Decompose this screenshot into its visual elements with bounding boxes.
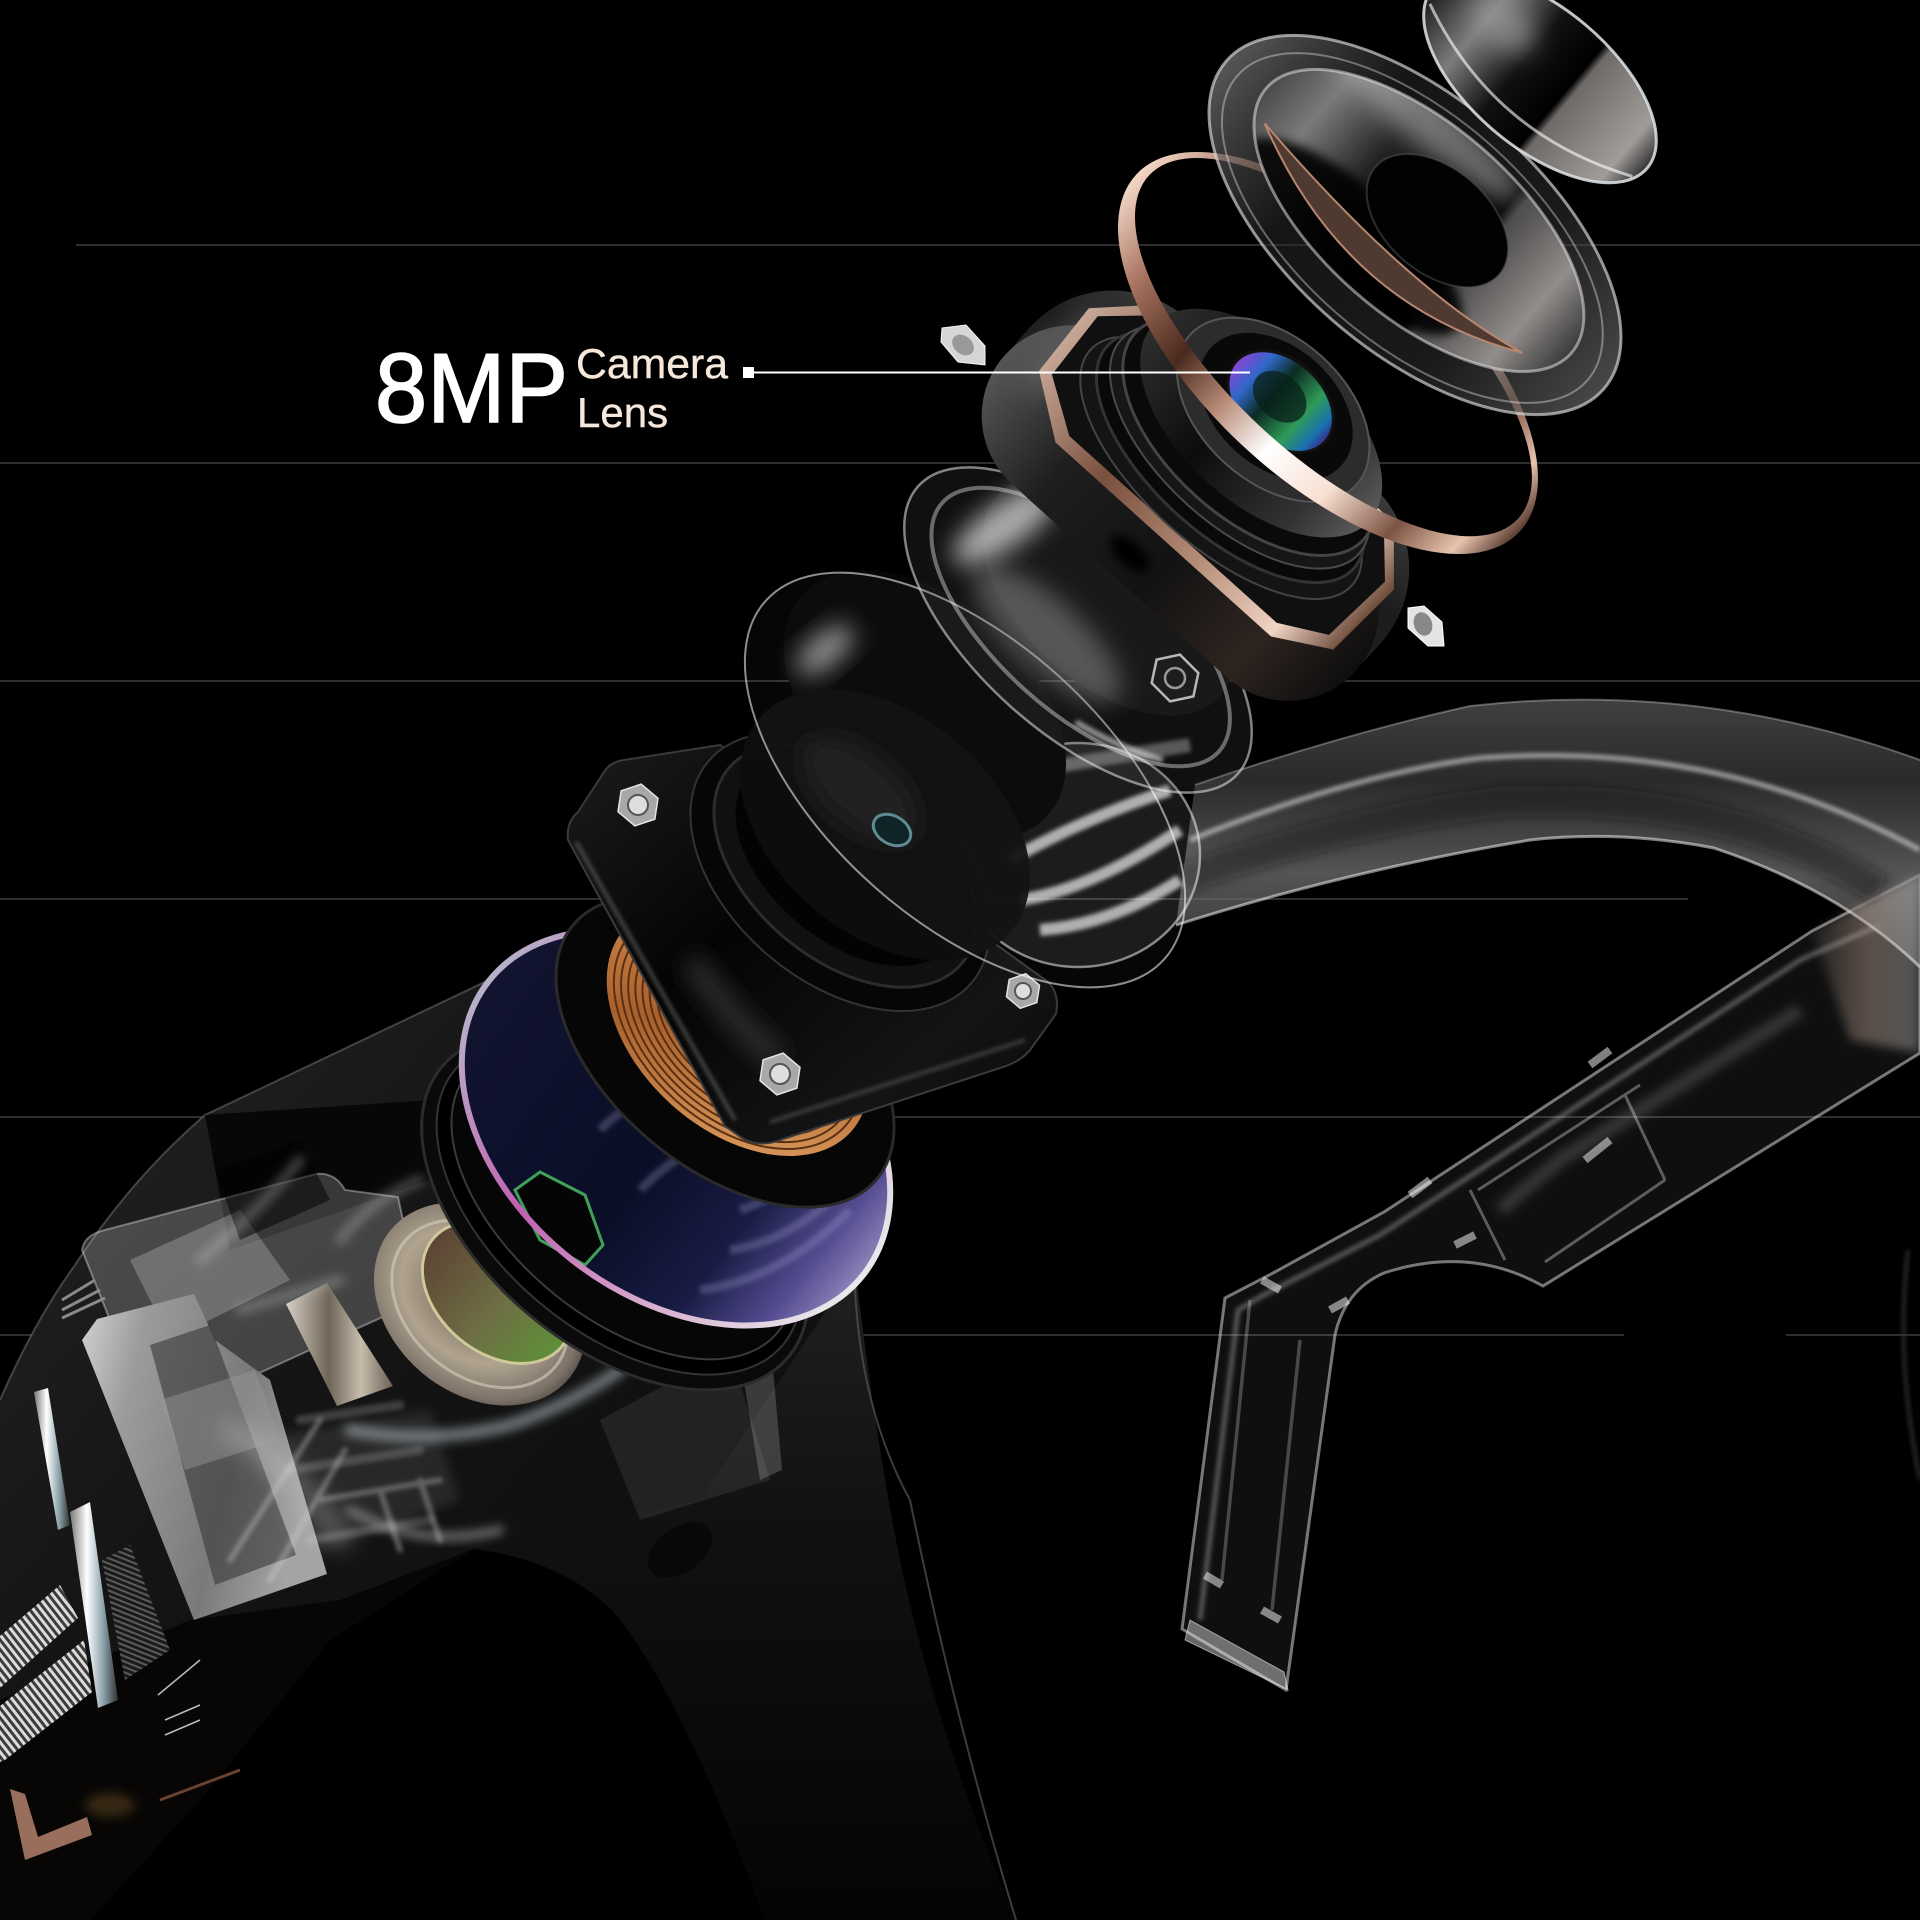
dark nut on glass	[1142, 645, 1208, 711]
frame arm edge highlight	[854, 1256, 1016, 1920]
black inner block	[205, 1100, 430, 1250]
bolt right	[1000, 968, 1046, 1014]
chip rod lower	[70, 1502, 118, 1708]
callout connector	[743, 367, 1250, 378]
bracket recesses	[150, 1325, 296, 1585]
copper trim	[1007, 275, 1427, 677]
left camera module body	[0, 970, 860, 1920]
copper ring	[1050, 82, 1606, 624]
heading: 8MP: 8MP	[375, 333, 568, 443]
square mounting plate	[568, 745, 1057, 1144]
small sensor lens	[868, 808, 916, 852]
back glass cup	[956, 743, 1200, 967]
dome shading	[1255, 72, 1528, 342]
plate reflections	[130, 1210, 290, 1340]
translucent glass plate	[82, 1174, 420, 1400]
loose nut right	[1408, 606, 1444, 646]
streaks in glass	[600, 1080, 860, 1290]
micro connector stripes	[102, 1545, 170, 1680]
black sphere behind flange	[733, 517, 1117, 893]
small traces	[158, 1660, 200, 1735]
label: Camera Lens	[576, 340, 729, 436]
upper glass flange with dome	[850, 387, 1327, 850]
small chevron marks	[62, 1280, 105, 1318]
dark notch behind plate	[215, 1140, 330, 1240]
label: Camera Lens: Lens	[577, 389, 668, 436]
dome rim	[1204, 15, 1634, 425]
faint far-right frame edge	[1904, 1250, 1920, 1480]
bolt bottom	[752, 1046, 808, 1102]
dome	[1204, 15, 1634, 425]
loose nut left	[941, 325, 985, 365]
frame arm	[430, 1200, 1016, 1920]
middle glass flange outline	[672, 497, 1258, 1063]
glasses temple arm	[1182, 875, 1920, 1690]
copper chord crescent	[1236, 124, 1525, 383]
dark core	[1341, 128, 1533, 314]
label: Camera Lens: Camera	[576, 340, 729, 387]
purple glass lens	[385, 849, 967, 1407]
black coil housing ring	[499, 836, 951, 1268]
transparent bridge tube	[1176, 700, 1920, 1053]
lens rim	[385, 849, 967, 1407]
copper bracket	[10, 1789, 92, 1860]
green hexagon reflection	[515, 1172, 603, 1265]
right side translucent panels	[600, 1350, 770, 1520]
top glass lens	[1388, 0, 1692, 222]
lower dark section	[0, 1549, 474, 1920]
colourful camera lens	[1208, 330, 1353, 473]
dark dome with small sensor	[688, 635, 1082, 1015]
main camera housing	[944, 198, 1497, 739]
beige inner lens barrel	[333, 1160, 627, 1448]
flange	[1144, 0, 1686, 484]
stepped cylinders	[1038, 292, 1404, 643]
beige metal connector and internal reflections	[200, 1160, 620, 1580]
silver bracket	[82, 1294, 327, 1620]
large glass dome lens	[1208, 34, 1622, 416]
dome highlight	[942, 471, 1068, 579]
copper coil	[558, 854, 918, 1206]
chip rod upper	[34, 1388, 70, 1530]
black cylinder on plate	[638, 677, 1042, 1067]
black rubber ring	[356, 964, 874, 1460]
yellow green glass	[395, 1193, 600, 1392]
memory strip upper	[0, 1585, 78, 1688]
bolt top left	[610, 777, 666, 833]
memory strip lower	[0, 1640, 92, 1762]
